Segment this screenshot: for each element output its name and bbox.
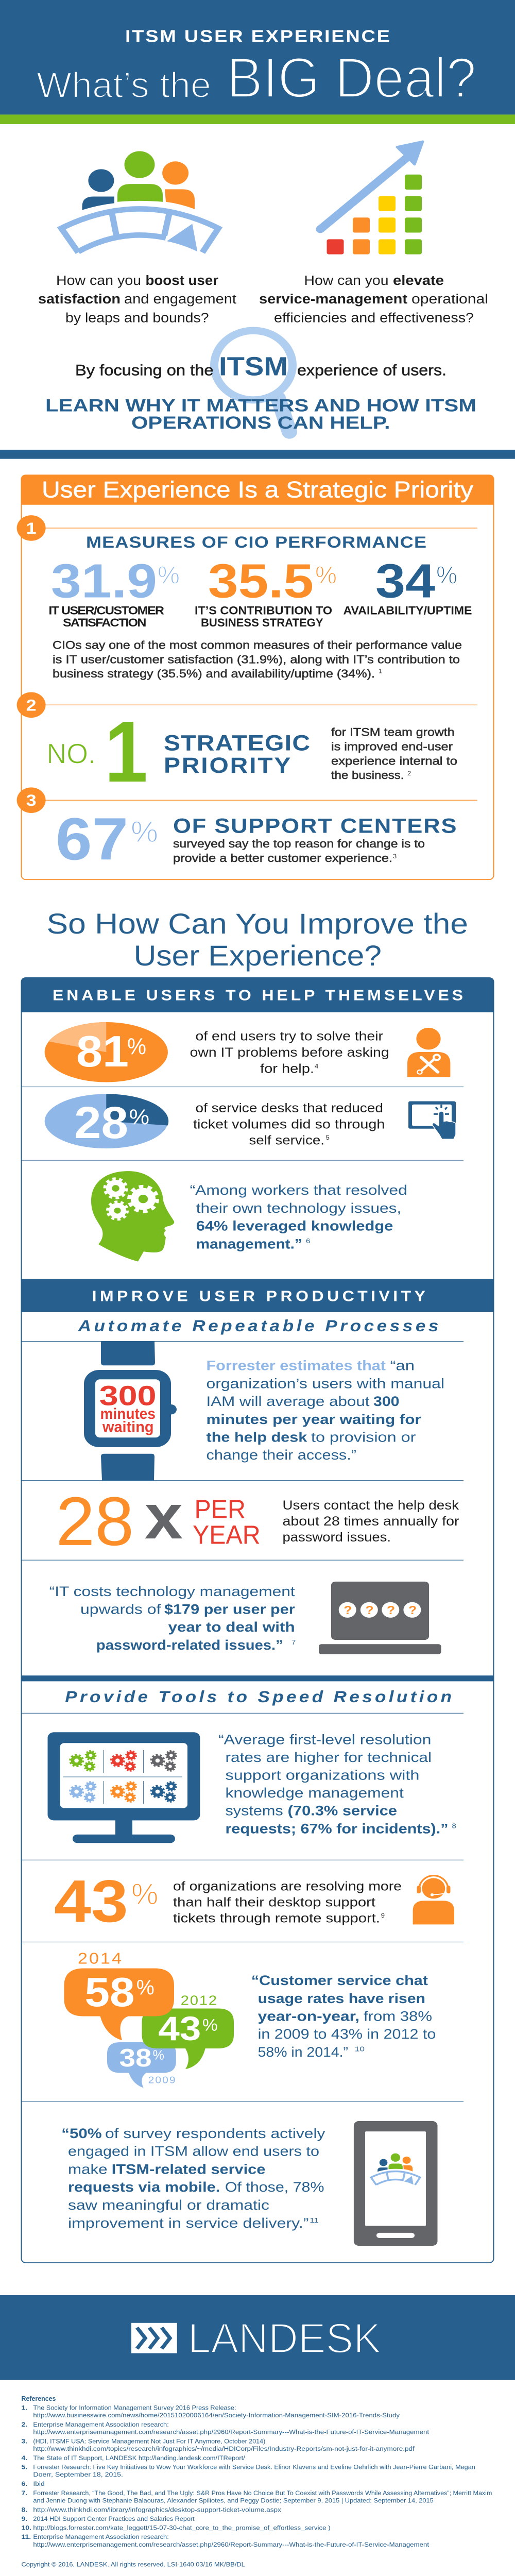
kicker: ITSM User Experience: ITSM USER EXPERIENCE	[125, 27, 390, 46]
reference list: 2014 HDI Support Center Practices and Salaries Report	[33, 2515, 195, 2522]
reference list: http://www.enterprisemanagement.com/research/asset.php/2960/Report-Summary---What-is-the-Future-of-IT-Service-Management	[33, 2541, 429, 2548]
reference list: http://www.businesswire.com/news/home/20151020006164/en/Society-Information-Management-SIM-2016-Trends-Study	[33, 2412, 400, 2419]
title: What's the BIG Deal?: BIG Deal?	[227, 46, 476, 110]
section heading: so how can you improve: So How Can You Improve the	[46, 908, 468, 940]
quote: mobile service requests: improvement in service delivery.”	[68, 2215, 308, 2231]
pie: 81%	[45, 1022, 168, 1082]
stat: 67%: %	[131, 816, 158, 849]
text: of service desks that reduced	[196, 1100, 383, 1115]
text: remote support: 9	[381, 1912, 385, 1919]
quote: customer service chat: usage rates have risen	[258, 1991, 425, 2006]
bubble: 2014 58%	[64, 1950, 174, 2040]
chart: chat usage speech bubbles	[64, 1950, 234, 2088]
reference list: 1.	[22, 2404, 27, 2411]
bubble: 2009 38%: %	[153, 2047, 164, 2062]
bubble: 2009 38%	[107, 2042, 176, 2088]
item 2: no. 1 strategic priority	[17, 692, 477, 801]
big number one: 1	[105, 703, 148, 801]
reference list: 5.	[22, 2463, 27, 2470]
references heading: References	[22, 2395, 56, 2402]
reference list: http://www.enterprisemanagement.com/research/asset.php/2960/Report-Summary---What-is-the-Future-of-IT-Service-Management	[33, 2428, 429, 2435]
text: Forrester estimate: minutes per year waiting for	[206, 1412, 421, 1427]
pie: 28%	[45, 1094, 168, 1148]
bubble: 2014 58%: 58	[84, 1970, 135, 2015]
icon: monitor with gears	[47, 1732, 200, 1843]
bubble: 2009 38%: 38	[119, 2044, 152, 2072]
text: remote support: tickets through remote support.	[173, 1911, 380, 1925]
reference list: (HDI, ITSMF USA: Service Management Not Just For IT Anymore, October 2014)	[33, 2437, 265, 2445]
icon: phone with app	[354, 2121, 438, 2246]
callout: learn why it matters: LEARN WHY IT MATTERS AND HOW ITSM	[45, 396, 476, 415]
footer band: LANDESK logo	[0, 2295, 515, 2380]
description: 3	[393, 853, 397, 860]
text: Forrester estimate	[206, 1358, 444, 1463]
icon: head with gears	[91, 1171, 174, 1262]
icon: support agent with headset	[413, 1876, 454, 1924]
reference list	[22, 2404, 492, 2548]
item 3: 67% of support centers	[17, 787, 477, 873]
number badge 3: 3	[26, 791, 37, 810]
stat row: 28%	[45, 1094, 456, 1148]
stat: 34%: 34	[375, 554, 435, 608]
stat: 31.9%: IT USER/CUSTOMER	[48, 605, 164, 617]
bubble: 2014 58%: %	[136, 1976, 154, 1999]
stat: 28x per year: YEAR	[193, 1519, 261, 1550]
reference list: 9.	[22, 2515, 27, 2522]
text: 5	[326, 1134, 330, 1141]
number badge 1: 1	[26, 519, 37, 537]
divider bar	[0, 450, 515, 459]
stat: 34%	[343, 554, 472, 617]
text: Forrester estimate: organization’s users with manual	[206, 1376, 444, 1392]
description	[173, 838, 425, 865]
quote: customer service chat: year-on-year,	[258, 2009, 359, 2024]
icon: laptop with password prompts	[319, 1582, 441, 1654]
text: by focusing on the ITSM experience of users: By focusing on the	[75, 362, 213, 379]
reference list: http://www.thinkhdi.com/library/infographics/desktop-support-ticket-volume.aspx	[33, 2506, 281, 2513]
stat: 31.9%: SATISFACTION	[63, 617, 146, 630]
quote: first-level resolution: requests; 67% for incidents).”	[226, 1821, 448, 1837]
description: for ITSM team growth	[331, 726, 455, 739]
reference list: Enterprise Management Association research:	[33, 2421, 169, 2428]
text: boost user satisfaction: How can you	[56, 273, 141, 288]
pie: 81%: 81	[76, 1027, 129, 1076]
pie: 81%: %	[127, 1034, 146, 1059]
description: is improved end-user	[331, 741, 453, 753]
copyright: Copyright © 2016, LANDESK. All rights reserved. LSI-1640 03/16 MK/BB/DL	[22, 2561, 245, 2568]
text: Forrester estimate: to provision or	[311, 1430, 416, 1445]
bubble: 2009 38%: 2009	[148, 2075, 176, 2086]
reference list: 3.	[22, 2437, 27, 2445]
paragraph: CIOs say one of the most common measures of their performance value	[53, 639, 462, 652]
quote: customer service chat: in 2009 to 43% in 2012 to	[258, 2026, 436, 2042]
label: OF SUPPORT CENTERS	[173, 815, 456, 838]
number badge 1	[17, 515, 46, 541]
quote: customer service chat: 10	[355, 2045, 365, 2053]
icon: laptop with password prompts: ?	[387, 1604, 395, 1617]
icon: watch, 300 minutes waiting	[84, 1342, 177, 1481]
text: elevate service management: service-management	[259, 292, 407, 307]
quote text: “Among workers that resolved	[190, 1183, 407, 1198]
text: elevate service management	[259, 273, 488, 325]
text: by focusing on the ITSM experience of users: ITSM	[219, 351, 288, 381]
bubble: 2012 43%	[142, 1993, 234, 2069]
reference list: The State of IT Support, LANDESK http://landing.landesk.com/ITReport/	[33, 2454, 245, 2462]
stat: 35.5%: IT’S CONTRIBUTION TO	[195, 605, 332, 617]
number badge 3	[17, 787, 46, 813]
stat: 28x per year: PER	[194, 1494, 246, 1524]
bubble: 2012 43%: 43	[158, 2010, 201, 2047]
section heading: so how can you improve	[46, 908, 468, 972]
band heading: enable users to help themselves: ENABLE USERS TO HELP THEMSELVES	[53, 988, 463, 1004]
paragraph: business strategy (35.5%) and availability/uptime (34%).	[53, 668, 375, 681]
quote: mobile service requests: make	[68, 2162, 107, 2177]
quote: first-level resolution: 8	[452, 1822, 456, 1830]
text: remote support: than half their desktop support	[173, 1895, 376, 1909]
title: What's the BIG Deal?	[37, 46, 476, 110]
subheading: automate repeatable processes: Automate Repeatable Processes	[78, 1317, 438, 1335]
stat: 28x per year	[56, 1481, 261, 1560]
text: own IT problems before asking	[190, 1045, 389, 1060]
icon: magnifying glass	[214, 331, 293, 432]
reference list: 6.	[22, 2480, 27, 2487]
reference list: Forrester Research: Five Key Initiatives to Wow Your Workforce with Service Desk. Elinor Klavens and Eveline Oehrlich with Jean-Pierre Garbani, Megan	[33, 2463, 475, 2470]
stat: 34%: AVAILABILITY/UPTIME	[343, 605, 472, 617]
reference list: 8.	[22, 2506, 27, 2513]
stat: 43%: %	[131, 1878, 158, 1911]
text: elevate service management: operational	[411, 292, 488, 307]
quote text: 64% leveraged knowledge	[196, 1218, 393, 1234]
reference list: 10.	[22, 2524, 31, 2531]
text: remote support	[173, 1879, 402, 1925]
description: the business.	[331, 769, 404, 782]
header banner	[0, 0, 515, 124]
quote: first-level resolution: knowledge management	[226, 1786, 404, 1801]
text: Forrester estimate: Forrester estimates that	[206, 1358, 386, 1374]
quote: mobile service requests: Of those, 78%	[225, 2180, 324, 2195]
quote: customer service chat	[251, 1973, 436, 2060]
icon: laptop with password prompts: ?	[408, 1604, 417, 1617]
reference list: Doerr, September 18, 2015.	[33, 2471, 123, 2478]
quote: mobile service requests: requests via mobile.	[68, 2180, 220, 2195]
quote: first-level resolution: rates are higher for technical	[226, 1750, 432, 1765]
quote: mobile service requests: engaged in ITSM allow end users to	[68, 2144, 319, 2159]
icon: watch, 300 minutes waiting: minutes	[100, 1405, 156, 1422]
text: Forrester estimate: “an	[390, 1358, 415, 1374]
stat: 28x per year: x	[145, 1481, 183, 1552]
text	[193, 1100, 385, 1147]
callout: learn why it matters: OPERATIONS CAN HELP.	[131, 413, 390, 433]
panel: user experience is a strategic priority	[17, 475, 494, 879]
icon: watch, 300 minutes waiting: 300	[99, 1381, 157, 1412]
quote: password-related costs: $179 per user per	[164, 1602, 295, 1617]
text: remote support: of organizations are resolving more	[173, 1879, 402, 1893]
stat: 34%: %	[436, 561, 457, 589]
stat: 31.9%: %	[158, 561, 180, 589]
quote: password-related costs: upwards of	[80, 1602, 161, 1617]
reference list: 4.	[22, 2454, 27, 2462]
quote: mobile service requests: saw meaningful or dramatic	[68, 2198, 269, 2213]
icon: people on bridge	[61, 151, 218, 252]
item 1: measures of CIO performance	[17, 515, 477, 681]
wordmark: LANDESK	[188, 2315, 381, 2362]
section heading: so how can you improve: User Experience?	[134, 940, 382, 972]
band: improve user productivity: IMPROVE USER PRODUCTIVITY	[92, 1289, 425, 1304]
quote: customer service chat: 58% in 2014.”	[258, 2044, 348, 2060]
description: 2	[407, 770, 411, 777]
quote: password-related costs: “IT costs technology management	[49, 1584, 295, 1600]
icon: tablet touch	[408, 1101, 456, 1139]
paragraph	[53, 639, 462, 681]
text: boost user satisfaction: satisfaction	[38, 292, 121, 307]
text: help desk contacts: password issues.	[282, 1530, 391, 1545]
description	[331, 726, 457, 782]
text: boost user satisfaction	[38, 273, 236, 325]
reference list: 7.	[22, 2489, 27, 2497]
references	[22, 2395, 492, 2568]
paragraph: 1	[379, 668, 382, 674]
text: of end users try to solve their	[196, 1029, 383, 1043]
subheading: provide tools to speed resolution: Provide Tools to Speed Resolution	[65, 1688, 452, 1706]
pie: 28%: %	[129, 1106, 149, 1129]
quote: customer service chat: from 38%	[364, 2009, 432, 2024]
text: Forrester estimate: change their access.”	[206, 1447, 356, 1463]
quote text	[190, 1183, 407, 1252]
text: boost user satisfaction: by leaps and bounds?	[65, 310, 209, 325]
quote: mobile service requests: “50%	[61, 2126, 102, 2142]
band: divider	[21, 1675, 494, 1681]
stat row: 81%	[45, 1022, 450, 1082]
panel heading: User Experience Is a Strategic Priority	[42, 477, 473, 503]
reference list: Enterprise Management Association research:	[33, 2533, 169, 2540]
text: by focusing on the ITSM experience of users: experience of users.	[297, 362, 447, 379]
reference list: 11.	[22, 2533, 31, 2540]
text: elevate service management: elevate	[393, 273, 444, 288]
text: help desk contacts: about 28 times annually for	[282, 1514, 459, 1529]
bubble: 2014 58%: 2014	[78, 1950, 122, 1967]
big number one	[46, 703, 148, 801]
stat: 43%: 43	[54, 1868, 128, 1935]
title: What's the BIG Deal?: What’s the	[37, 65, 211, 105]
text: help desk contacts: Users contact the help desk	[282, 1498, 459, 1513]
big number one: NO.	[46, 738, 96, 770]
text	[190, 1029, 389, 1076]
quote: customer service chat: “Customer service chat	[251, 1973, 428, 1989]
stat: 67%: 67	[56, 806, 128, 873]
text: 4	[315, 1063, 318, 1070]
number badge 2	[17, 692, 46, 718]
quote: password-related costs: 7	[291, 1639, 296, 1647]
panel: improve the user experience	[21, 977, 494, 2263]
strategic priority label	[164, 731, 310, 777]
icon: person with tools	[407, 1028, 450, 1077]
subheading: MEASURES OF CIO PERFORMANCE	[86, 533, 426, 551]
icon: laptop with password prompts: ?	[366, 1604, 373, 1617]
band: improve user productivity	[21, 1279, 494, 1312]
number badge 2: 2	[26, 696, 37, 715]
description: experience internal to	[331, 755, 457, 768]
stat: 35.5%: 35.5	[208, 554, 314, 608]
quote: password-related costs	[49, 1584, 296, 1653]
quote: first-level resolution	[218, 1732, 456, 1837]
stat: 31.9%: 31.9	[51, 554, 157, 608]
text: ticket volumes did so through	[193, 1117, 385, 1131]
bubble: 2012 43%: %	[202, 2015, 218, 2035]
strategic priority label: PRIORITY	[164, 753, 290, 777]
logo mark	[131, 2323, 177, 2353]
quote: first-level resolution: “Average first-level resolution	[218, 1732, 431, 1748]
reference list: 2.	[22, 2421, 27, 2428]
reference list: The Society for Information Management Survey 2016 Press Release:	[33, 2404, 236, 2411]
stat: 35.5%: %	[315, 561, 337, 589]
text: elevate service management: efficiencies and effectiveness?	[274, 310, 474, 325]
stat: 35.5%	[195, 554, 337, 630]
reference list: Ibid	[33, 2480, 45, 2487]
bubble: 2012 43%: 2012	[181, 1993, 217, 2008]
quote: password-related costs: password-related issues.”	[96, 1637, 283, 1653]
strategic priority label: STRATEGIC	[164, 731, 310, 755]
quote: mobile service requests: ITSM-related service	[112, 2162, 265, 2177]
text: by focusing on the ITSM experience of users	[75, 351, 447, 381]
stat: 28x per year: 28	[56, 1483, 134, 1560]
text: Forrester estimate: IAM will average about	[206, 1394, 370, 1410]
description: provide a better customer experience.	[173, 852, 392, 865]
quote text: their own technology issues,	[196, 1200, 401, 1216]
text: for help.	[260, 1061, 314, 1076]
quote: mobile service requests: of survey respondents actively	[105, 2126, 325, 2142]
pie: 28%: 28	[74, 1097, 128, 1148]
quote: mobile service requests	[61, 2126, 325, 2231]
quote: first-level resolution: support organizations with	[226, 1768, 419, 1783]
quote: first-level resolution: (70.3% service	[288, 1803, 397, 1819]
callout: learn why it matters	[45, 396, 476, 433]
icon: laptop with password prompts: ?	[344, 1604, 352, 1617]
reference list: and Jennie Duong with Stephanie Balaouras, Alexander Spiliotes, and Peggy Dostie; September 9, 2015 | Updated: September 14, 2015	[33, 2497, 434, 2504]
text: self service.	[249, 1133, 324, 1147]
icon: rising arrow with bars	[320, 142, 423, 255]
reference list: http://www.thinkhdi.com/topics/research/infographics/~/media/HDICorp/Files/Industry-Reports/sm-not-just-for-it-anymore.pdf	[33, 2445, 415, 2452]
text: boost user satisfaction: and engagement	[124, 292, 236, 307]
text: help desk contacts	[282, 1498, 459, 1545]
text: elevate service management: How can you	[304, 273, 388, 288]
description: surveyed say the top reason for change is to	[173, 838, 425, 851]
stat: 35.5%: BUSINESS STRATEGY	[201, 617, 323, 630]
text: Forrester estimate: 300	[373, 1394, 399, 1410]
quote text: management.”	[196, 1236, 302, 1252]
quote: password-related costs: year to deal with	[168, 1620, 295, 1635]
paragraph: is IT user/customer satisfaction (31.9%), along with IT’s contribution to	[53, 654, 460, 666]
stat: 31.9%	[48, 554, 180, 630]
quote: first-level resolution: systems	[226, 1803, 283, 1819]
quote: mobile service requests: 11	[310, 2217, 319, 2225]
quote text: 6	[306, 1238, 310, 1245]
reference list: http://blogs.forrester.com/kate_leggett/15-07-30-chat_core_to_the_promise_of_effortless_service )	[33, 2524, 331, 2531]
quote row: head with gears	[91, 1171, 407, 1262]
text: Forrester estimate: the help desk	[206, 1430, 307, 1445]
text: boost user satisfaction: boost user	[145, 273, 218, 288]
icon: watch, 300 minutes waiting: waiting	[102, 1418, 153, 1435]
